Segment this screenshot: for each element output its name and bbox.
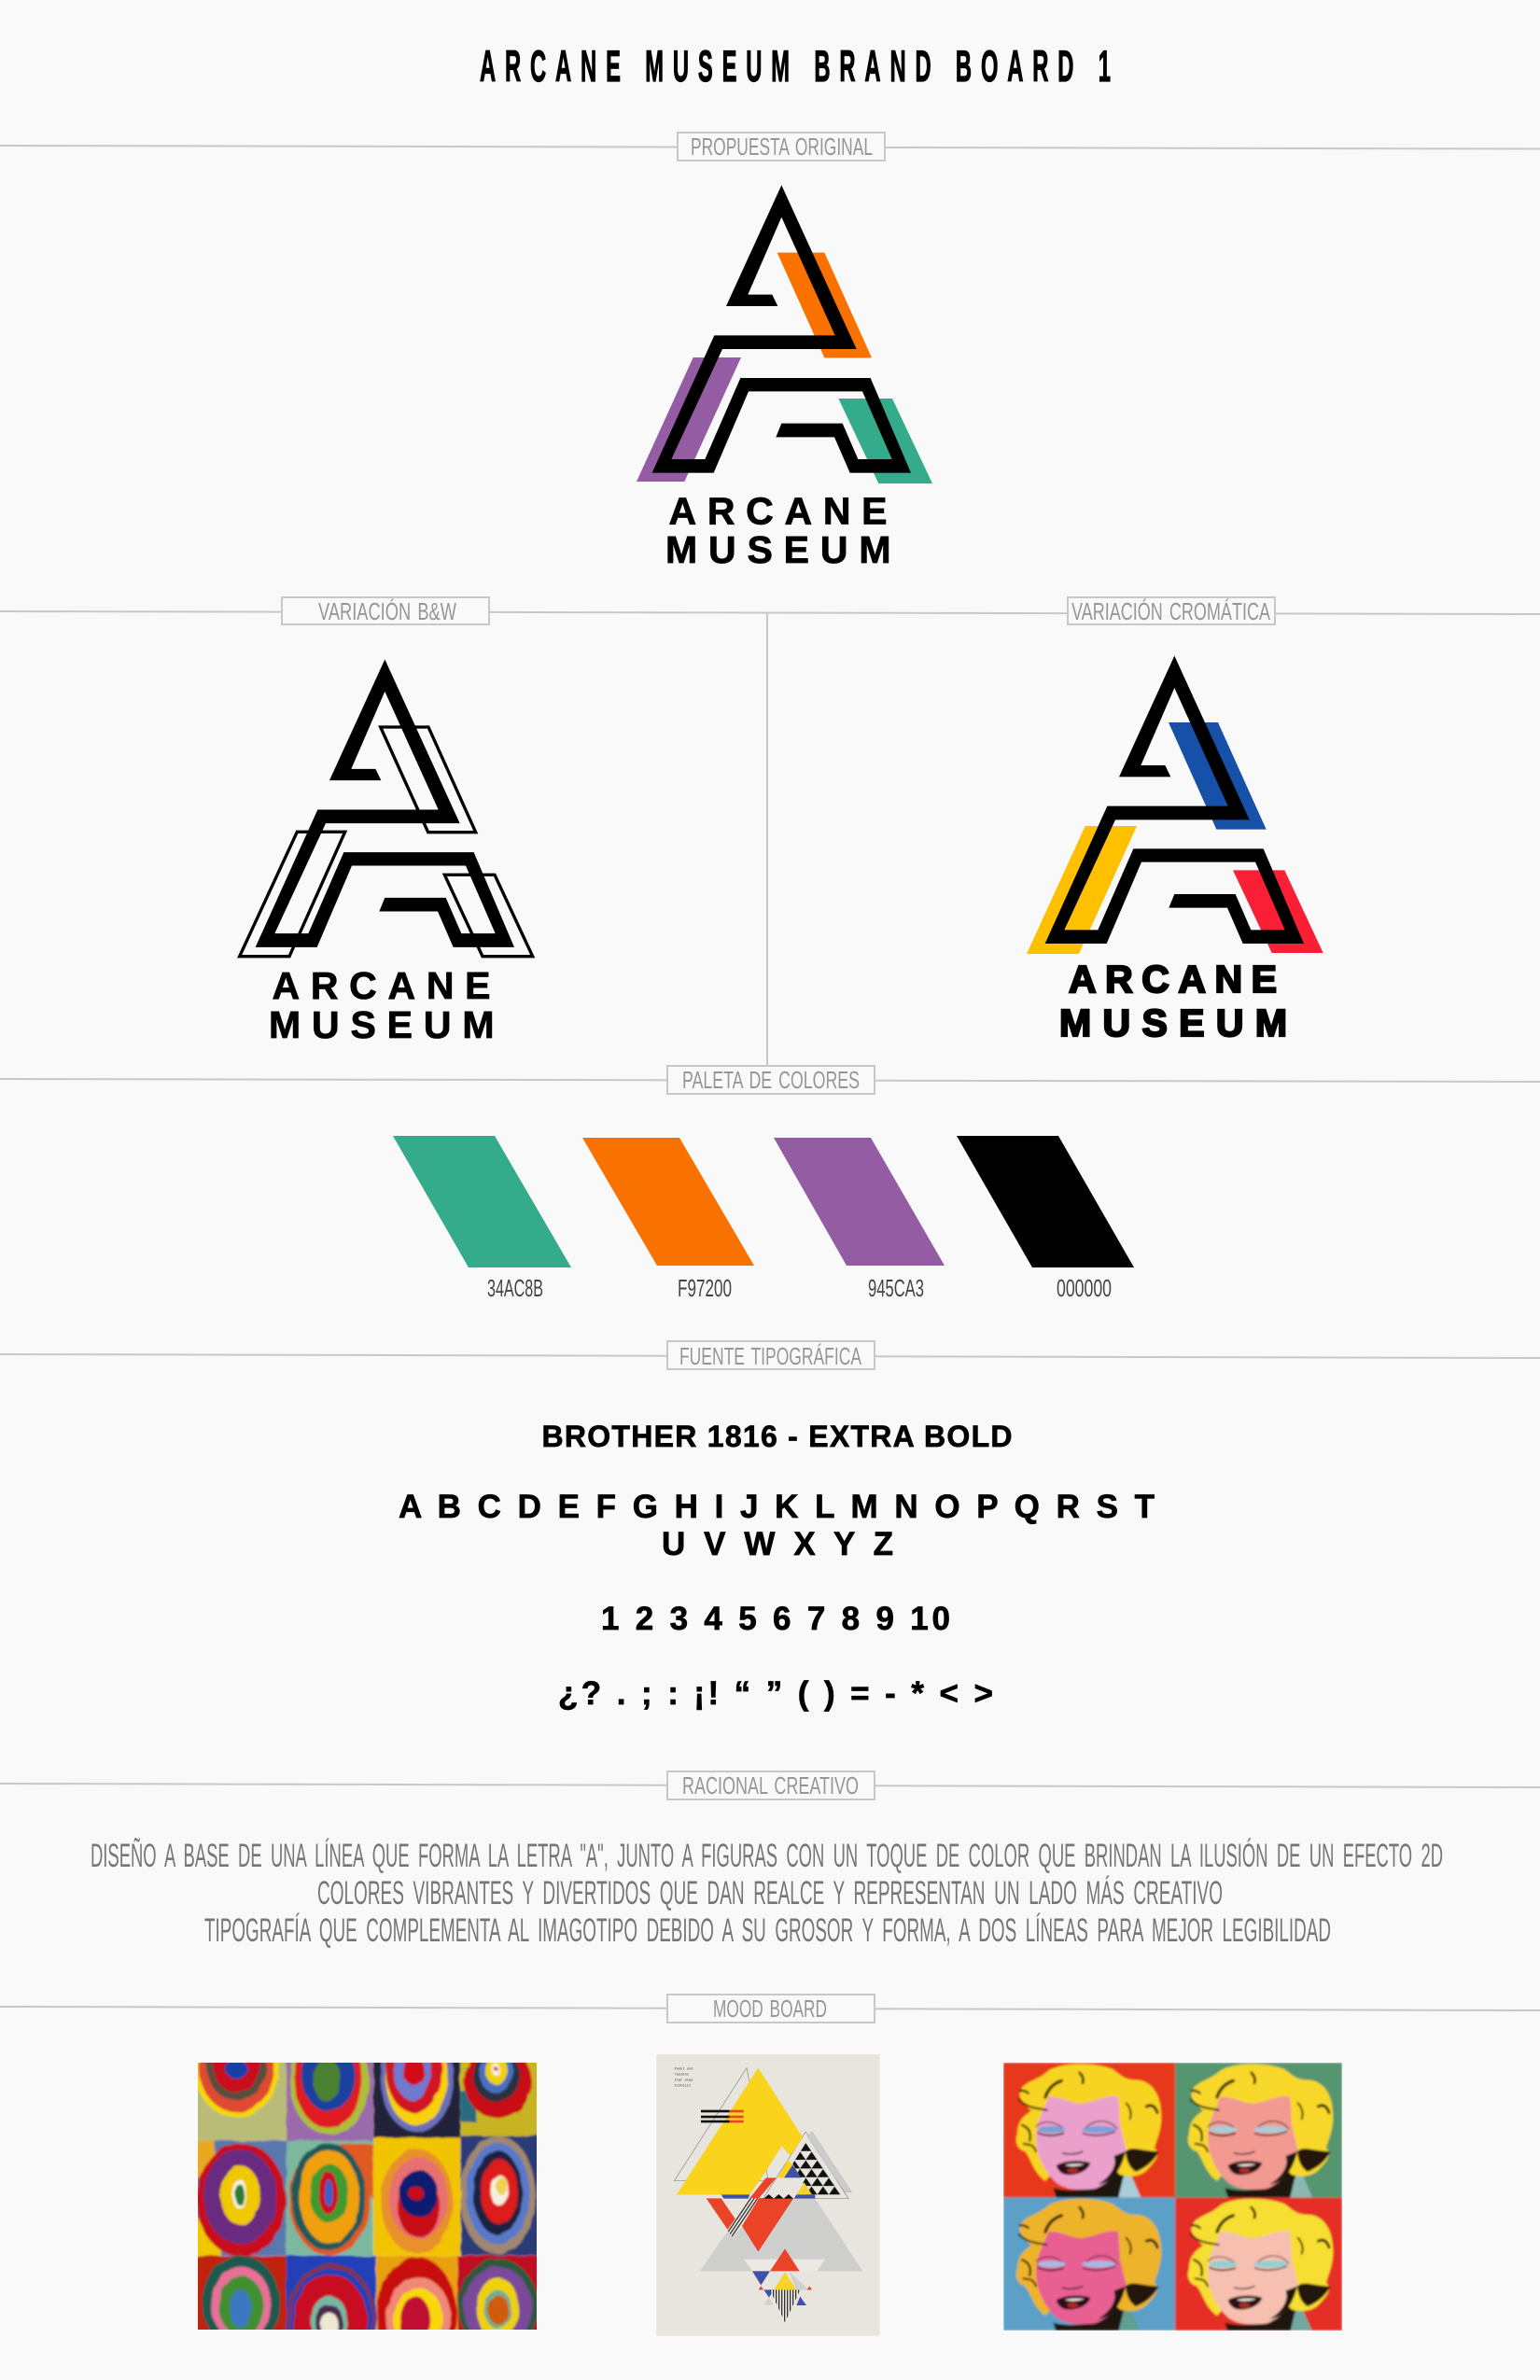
section header: propuesta original: PROPUESTA ORIGINAL	[691, 134, 873, 161]
type specimen: BROTHER 1816 - EXTRA BOLD	[541, 1420, 1012, 1453]
section header: racional creativo: RACIONAL CREATIVO	[682, 1773, 859, 1799]
creative rationale text	[91, 1838, 1443, 1949]
type specimen	[399, 1420, 1155, 1712]
swatch: green: 34AC8B	[487, 1274, 543, 1302]
mood image: geometric triangles poster: Tendenz	[675, 2072, 689, 2077]
section header: mood board: MOOD BOARD	[713, 1996, 827, 2023]
logo: chromatic variation	[1027, 656, 1323, 1044]
swatch: orange	[582, 1138, 754, 1302]
mood image: geometric triangles poster: Einheits	[675, 2084, 691, 2089]
mood image: four-colour pop art portraits	[1003, 2063, 1342, 2331]
mood image: geometric triangles poster: klar etwa	[675, 2079, 693, 2083]
mood image: geometric triangles poster: Punkt und	[675, 2066, 693, 2071]
section header: fuente tipografica: FUENTE TIPOGRÁFICA	[679, 1343, 862, 1370]
swatch: purple	[774, 1138, 945, 1302]
logo: black and white variation: MUSEUM	[269, 1003, 495, 1046]
swatch: purple: 945CA3	[868, 1274, 924, 1302]
type specimen: 1 2 3 4 5 6 7 8 9 10	[601, 1601, 950, 1637]
section header: propuesta original	[0, 133, 1540, 161]
section header: racional creativo	[0, 1771, 1540, 1799]
section header: paleta de colores	[0, 1066, 1540, 1094]
section header: mood board	[0, 1995, 1540, 2023]
swatch: black	[957, 1136, 1134, 1302]
logo: black and white variation: ARCANE	[273, 964, 491, 1007]
type specimen: ¿? . ; : ¡! “ ” ( ) = - * < >	[558, 1675, 993, 1712]
title: ARCANE MUSEUM BRAND BOARD 1	[480, 41, 1111, 91]
type specimen: U V W X Y Z	[662, 1526, 893, 1562]
logo: chromatic variation: ARCANE	[1069, 958, 1277, 1001]
type specimen: A B C D E F G H I J K L M N O P Q R S T	[399, 1489, 1155, 1525]
logo: original colour version: MUSEUM	[665, 528, 890, 571]
logo: black and white variation	[240, 659, 533, 1046]
swatch: green	[393, 1136, 571, 1302]
swatch: orange: F97200	[678, 1274, 732, 1302]
logo: original colour version: ARCANE	[668, 489, 887, 532]
mood image: concentric circles painting	[198, 2063, 537, 2330]
section header: variacion b&w and cromatica: VARIACIÓN B&W	[318, 598, 457, 625]
logo: chromatic variation: MUSEUM	[1059, 1001, 1287, 1044]
mood image: geometric triangles poster	[656, 2054, 880, 2336]
section header: variacion b&w and cromatica	[0, 597, 1540, 1080]
swatch: black: 000000	[1057, 1274, 1112, 1302]
logo: original colour version	[637, 185, 932, 571]
colour palette swatches	[393, 1136, 1134, 1302]
section header: variacion b&w and cromatica: VARIACIÓN CROMÁTICA	[1071, 598, 1271, 625]
section header: fuente tipografica	[0, 1341, 1540, 1370]
section header: paleta de colores: PALETA DE COLORES	[682, 1068, 860, 1094]
